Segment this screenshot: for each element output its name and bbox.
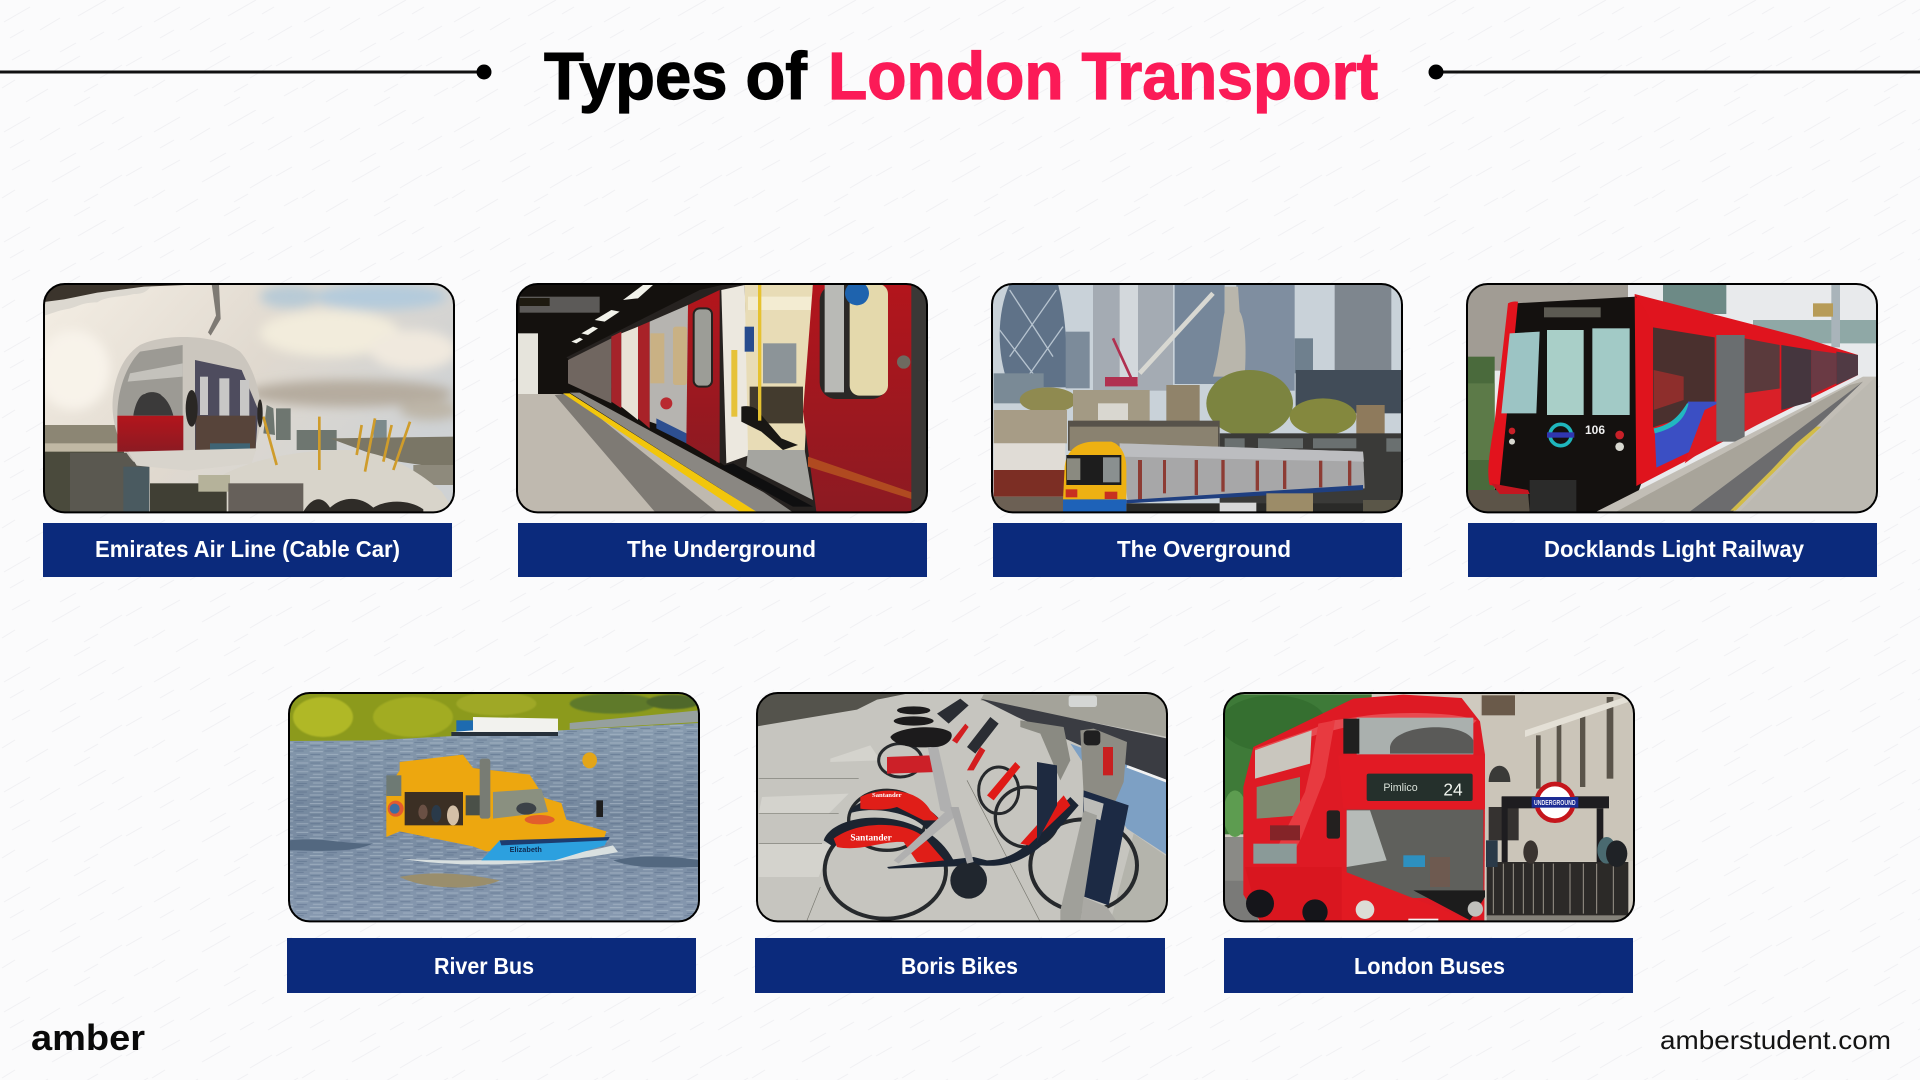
logo: amber: amber xyxy=(31,1017,145,1058)
photo: Santander hire bikes: Santander xyxy=(850,833,892,843)
photo: red double-decker bus: Pimlico xyxy=(1383,782,1418,794)
panel: The Overground xyxy=(992,284,1403,577)
label xyxy=(755,938,1165,993)
photo: DLR train: 106 xyxy=(1585,423,1605,437)
photo: overground train and city skyline xyxy=(992,284,1403,512)
photo: red double-decker bus: UNDERGROUND xyxy=(1534,800,1576,807)
photo: yellow amphibious boat on the river xyxy=(289,692,700,924)
heading text xyxy=(544,39,1378,114)
panel: Docklands Light Railway xyxy=(1467,284,1878,577)
label: Emirates Air Line (Cable Car) xyxy=(95,536,400,562)
photo: yellow amphibious boat on the river: Elizabeth xyxy=(510,845,542,854)
right rule with dot xyxy=(1428,64,1920,80)
photo: DLR train xyxy=(1467,284,1878,512)
panel: Emirates Air Line xyxy=(37,283,460,577)
title xyxy=(0,39,1920,114)
photo: cable car xyxy=(37,283,460,512)
panel: The Underground xyxy=(517,281,930,577)
panel: Boris Bikes xyxy=(755,693,1168,993)
photo: Santander hire bikes: Santander xyxy=(872,792,902,799)
label xyxy=(993,523,1402,577)
photo: Santander hire bikes xyxy=(757,693,1168,923)
photo: tube train xyxy=(517,281,930,512)
panel: River Bus xyxy=(287,692,700,993)
label: The Overground xyxy=(1117,536,1291,562)
label xyxy=(1468,523,1877,577)
label xyxy=(43,523,452,577)
label: River Bus xyxy=(434,953,534,979)
label: Docklands Light Railway xyxy=(1544,536,1804,562)
label: Boris Bikes xyxy=(901,953,1018,979)
label xyxy=(518,523,927,577)
photo: red double-decker bus: 24 xyxy=(1443,779,1463,799)
label xyxy=(1224,938,1633,993)
website url: amberstudent.com xyxy=(1660,1025,1891,1055)
heading text: London Transport xyxy=(828,39,1378,114)
heading text: Types of xyxy=(544,39,808,114)
panel: London Buses xyxy=(1220,693,1635,993)
photo: red double-decker bus xyxy=(1220,693,1635,925)
left rule with dot xyxy=(0,64,492,80)
label xyxy=(287,938,696,993)
label: The Underground xyxy=(627,536,816,562)
label: London Buses xyxy=(1354,953,1505,979)
